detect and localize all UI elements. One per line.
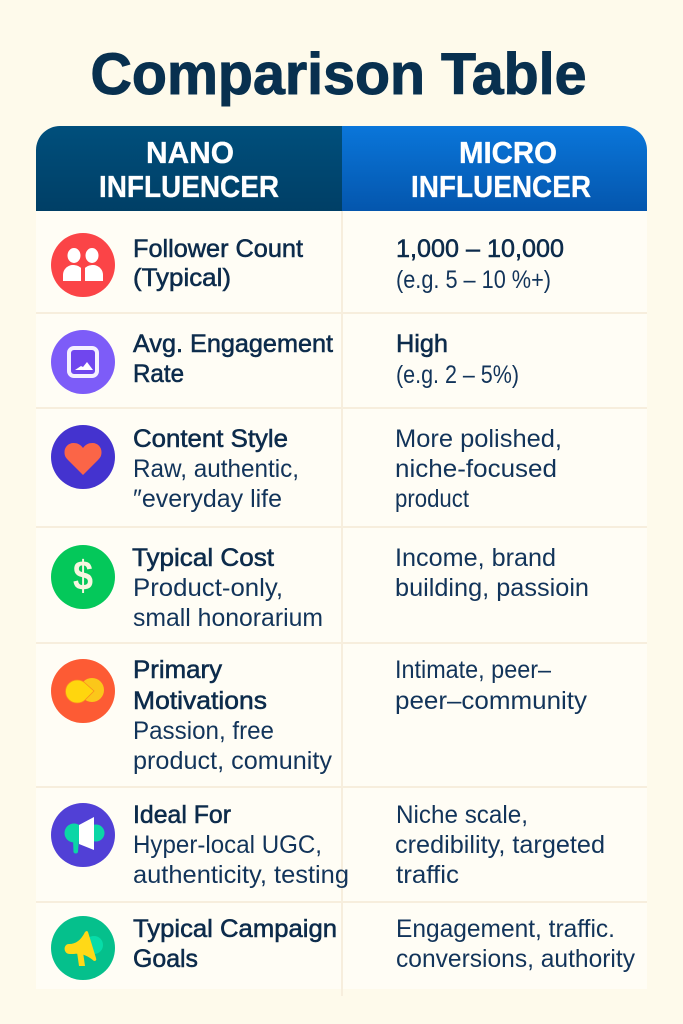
micro value: Niche scale, <box>396 801 528 829</box>
label <box>132 544 323 632</box>
micro value <box>396 915 635 973</box>
label: Typical Campaign <box>133 915 337 943</box>
micro value: Intimate, peer– <box>395 656 551 684</box>
table <box>36 126 647 996</box>
micro value: (e.g. 5 – 10 %+) <box>396 266 551 294</box>
label: Primary <box>133 656 223 684</box>
label: (Typical) <box>133 264 231 292</box>
icon: dollar: $ <box>73 552 93 599</box>
label: Hyper-local UGC, <box>133 831 322 859</box>
label <box>133 801 349 889</box>
row: content style <box>51 425 562 513</box>
micro value: product <box>395 485 469 513</box>
micro value: 1,000 – 10,000 <box>396 235 564 263</box>
label <box>133 915 337 973</box>
row: ideal for <box>51 801 605 889</box>
label: Ideal For <box>133 801 231 829</box>
micro value <box>395 801 605 889</box>
title: Comparison Table <box>90 42 586 107</box>
label <box>133 235 303 292</box>
micro value: (e.g. 2 – 5%) <box>396 361 519 389</box>
label: Content Style <box>133 425 288 453</box>
row dividers <box>36 211 647 996</box>
header: nano influencer <box>36 126 342 211</box>
micro value: credibility, targeted <box>395 831 605 859</box>
micro value: Engagement, traffic. <box>396 915 615 943</box>
icon: heart <box>51 425 115 489</box>
micro value: Income, brand <box>395 544 556 572</box>
label: Typical Cost <box>132 544 274 572</box>
label: Follower Count <box>133 235 303 263</box>
row: engagement <box>51 330 519 394</box>
header: nano influencer: INFLUENCER <box>99 169 279 204</box>
header: micro influencer <box>342 126 647 211</box>
label: Motivations <box>133 687 267 715</box>
label: Avg. Engagement <box>133 330 333 358</box>
header: micro influencer: MICRO <box>459 135 557 170</box>
label: Rate <box>133 360 184 388</box>
label: product, comunity <box>133 747 332 775</box>
micro value: More polished, <box>395 425 562 453</box>
micro value: niche-focused <box>395 455 557 483</box>
table body background <box>36 205 647 989</box>
header: micro influencer: INFLUENCER <box>411 169 591 204</box>
micro value: building, passioin <box>395 574 589 602</box>
icon: people <box>51 233 115 297</box>
label: Raw, authentic, <box>133 455 299 483</box>
micro value: conversions, authority <box>396 945 635 973</box>
row: campaign goals <box>51 915 635 980</box>
micro value <box>395 425 562 513</box>
row: primary motivations <box>51 656 588 775</box>
label: Goals <box>133 945 198 973</box>
icon: megaphone yellow <box>51 916 115 980</box>
label: ″everyday life <box>133 485 282 513</box>
row: follower count <box>51 233 564 297</box>
micro value <box>396 235 564 294</box>
label: Passion, free <box>133 717 274 745</box>
label: Product-only, <box>133 574 283 602</box>
micro value: traffic <box>396 861 459 889</box>
micro value <box>395 656 588 715</box>
icon: image <box>51 330 115 394</box>
micro value: peer–community <box>395 687 588 715</box>
icon: linked shapes <box>51 659 115 723</box>
label <box>133 425 299 513</box>
icon: dollar <box>51 545 115 609</box>
header: nano influencer: NANO <box>146 135 234 170</box>
label <box>133 656 332 775</box>
label: small honorarium <box>133 604 323 632</box>
micro value: High <box>396 330 448 358</box>
row: typical cost <box>51 544 589 632</box>
label <box>133 330 333 388</box>
label: authenticity, testing <box>133 861 349 889</box>
micro value <box>395 544 589 602</box>
icon: megaphone white <box>51 803 115 867</box>
micro value <box>396 330 519 389</box>
